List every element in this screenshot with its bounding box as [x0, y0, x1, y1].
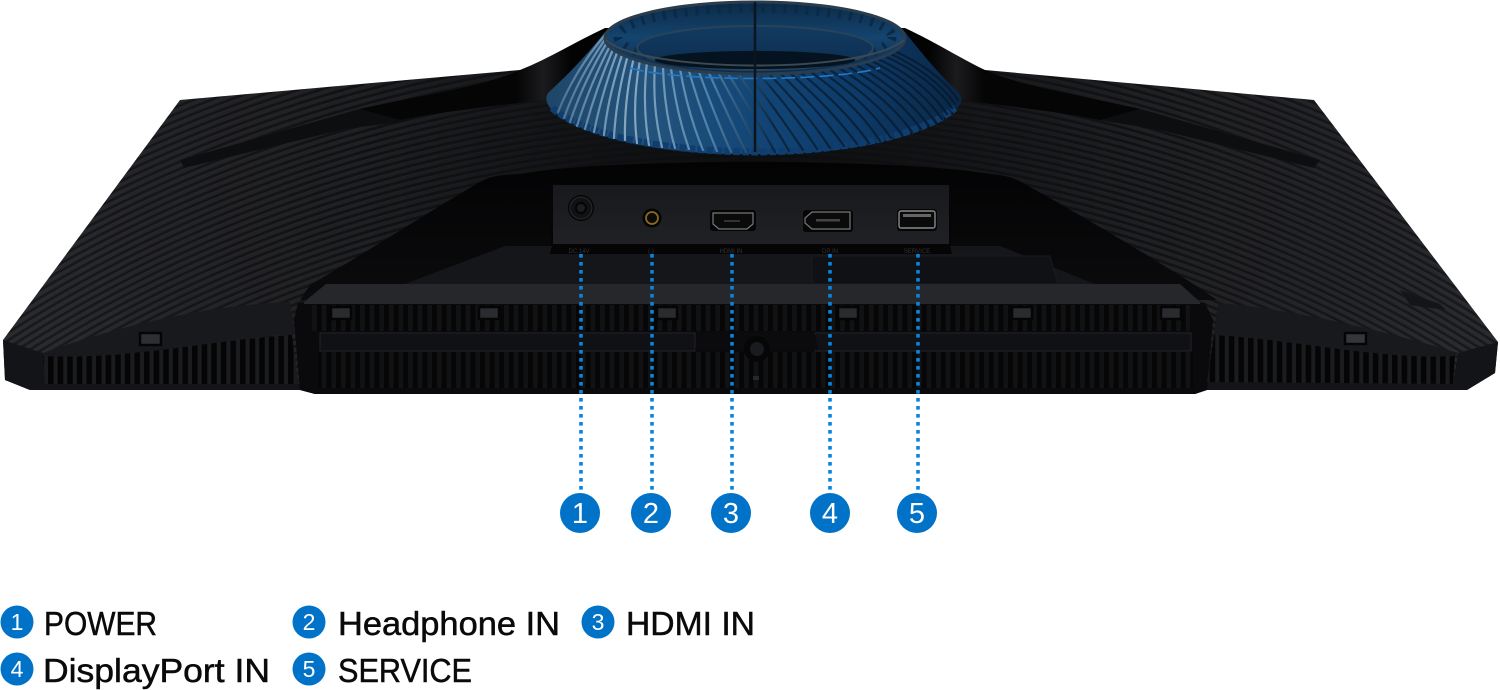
left cover panel: [320, 333, 695, 351]
right vent: [1207, 335, 1455, 384]
plate label strip: DP IN: [822, 249, 838, 255]
ring inner bowl: [605, 2, 905, 74]
center screw: [744, 336, 770, 380]
legend: SERVICE: SERVICE: [338, 652, 472, 689]
top bar: [304, 284, 1200, 304]
marker 4: 4: [822, 498, 838, 530]
right lip panel: [1214, 303, 1458, 357]
marker 3: [711, 493, 751, 533]
legend: Headphone IN: Headphone IN: [338, 605, 560, 642]
center cover: [695, 333, 818, 350]
lock slot: [1400, 290, 1446, 310]
legend: POWER: [0, 605, 157, 642]
legend: POWER: 1: [11, 609, 23, 635]
right side trim: [1207, 290, 1458, 384]
marker 2: [631, 493, 671, 533]
monitor body silhouette: [3, 70, 1498, 394]
ring seam: [754, 2, 756, 152]
right cover panel: [815, 333, 1191, 351]
left clip: [140, 333, 161, 345]
left side trim: [43, 302, 298, 384]
legend: SERVICE: 5: [303, 656, 315, 682]
left vent: [43, 335, 298, 384]
ring bottom teeth: [552, 108, 955, 152]
power port: [568, 195, 594, 221]
marker 2: 2: [643, 498, 659, 530]
dotted leader lines: [581, 254, 918, 492]
left dark slit: [180, 88, 470, 168]
stand neck swoop: [360, 28, 1140, 120]
lower chassis: [294, 284, 1213, 394]
legend: DisplayPort IN: DisplayPort IN: [43, 652, 270, 689]
plate label strip: [550, 245, 952, 255]
plate label strip: DC 14V: [568, 249, 590, 255]
plate label strip: ( ): [648, 249, 654, 255]
legend: DisplayPort IN: 4: [11, 656, 24, 682]
legend: HDMI IN: 3: [592, 609, 604, 635]
lower chassis base: [294, 303, 1213, 394]
legend: POWER: POWER: [44, 605, 157, 642]
left lip panel: [43, 302, 295, 357]
ring rim highlight: [606, 40, 904, 66]
ring fins: [558, 35, 958, 152]
marker 5: [897, 493, 937, 533]
DisplayPort port: [803, 210, 853, 232]
ring outer wall: [546, 32, 961, 154]
legend: [0, 605, 755, 689]
right clip: [1345, 333, 1366, 344]
right dark slit: [1030, 88, 1320, 168]
marker 1: 1: [572, 498, 588, 530]
ring inner fins: [618, 8, 892, 66]
marker 1: [560, 493, 600, 533]
central recess behind ports: [300, 162, 1217, 300]
lower vent row: [318, 352, 1193, 388]
USB port: [897, 209, 937, 231]
marker 5: 5: [909, 498, 925, 530]
plate label strip: SERVICE: [904, 249, 930, 255]
stand ring: [546, 2, 961, 154]
service door outline: [812, 256, 1058, 284]
marker 3: 3: [723, 498, 739, 530]
ring inner step: [637, 26, 873, 70]
headphone port: [642, 208, 662, 228]
port plate: [550, 184, 952, 255]
upper vent row: [312, 305, 1190, 331]
recess floor: [405, 246, 1095, 284]
right corner cap: [1207, 342, 1498, 390]
clips: [331, 307, 1181, 319]
numbered markers: [560, 493, 937, 533]
legend: Headphone IN: 2: [303, 609, 315, 635]
marker 4: [810, 493, 850, 533]
HDMI port: [710, 210, 756, 231]
left corner cap: [3, 340, 300, 390]
ring inner hole: [655, 51, 855, 69]
monitor back: [3, 2, 1498, 394]
ring front blue line: [630, 68, 880, 78]
legend: HDMI IN: HDMI IN: [626, 605, 755, 642]
plate label strip: HDMI IN: [720, 249, 742, 255]
